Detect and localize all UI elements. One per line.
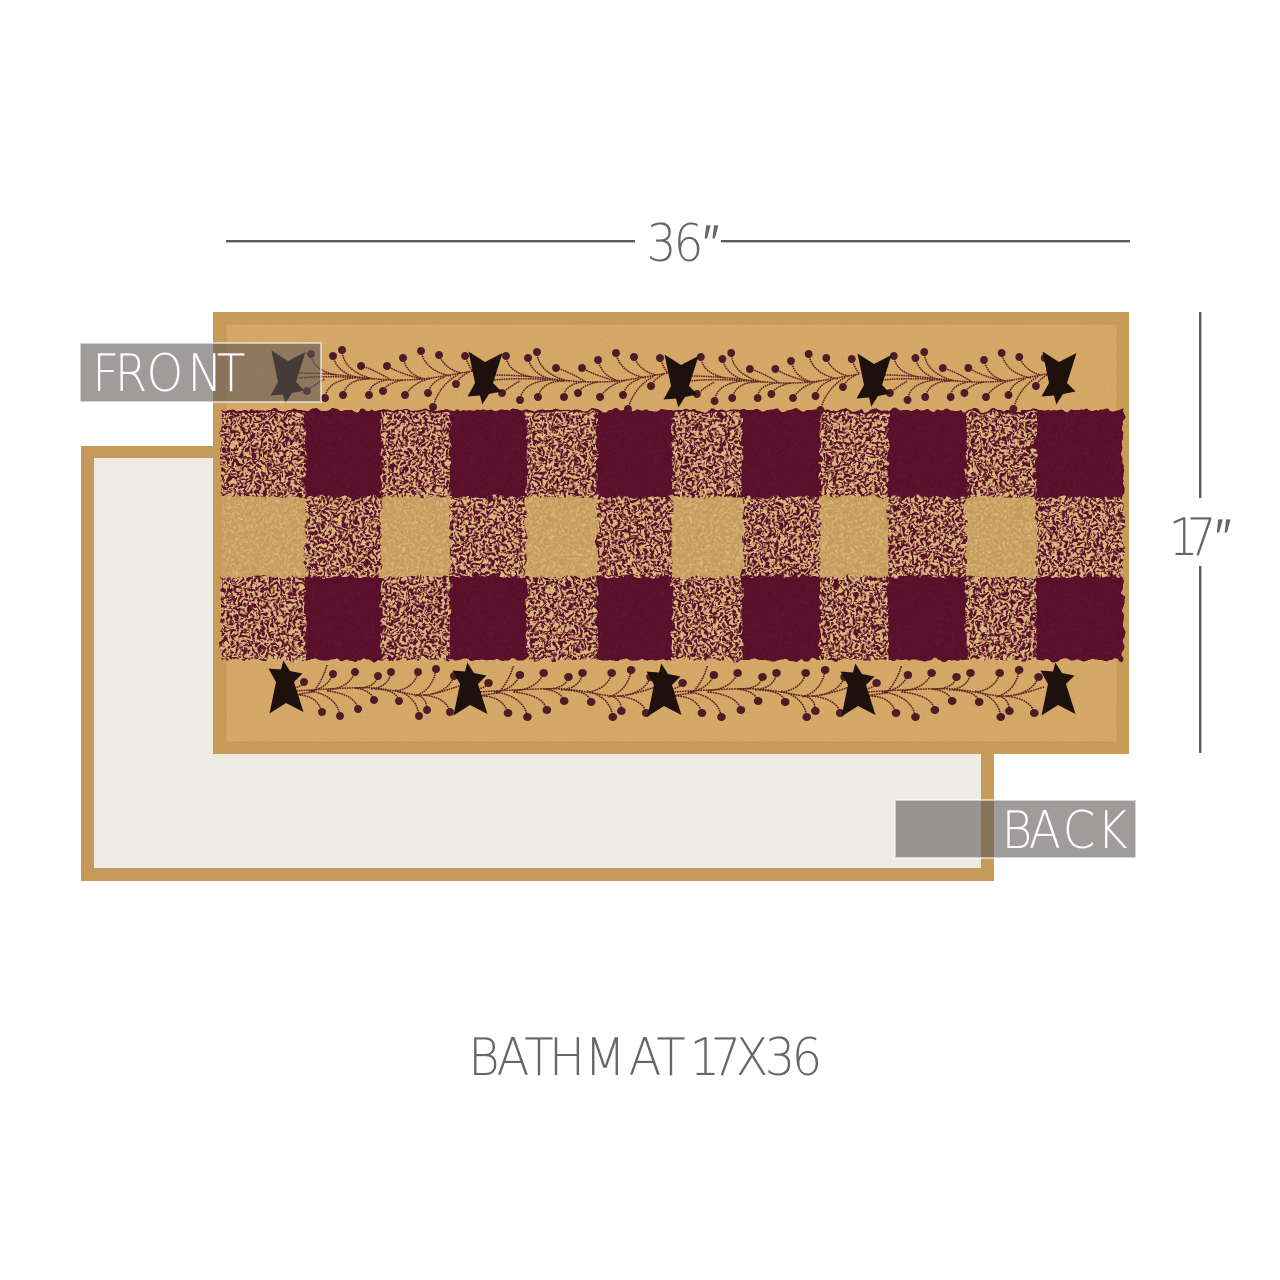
caption: BATHMAT 17X36	[468, 1027, 822, 1087]
top stars	[270, 350, 1076, 408]
width dimension: 36 inches: 36″	[647, 213, 719, 274]
bottom vines	[294, 665, 1044, 721]
back of bathmat	[81, 446, 994, 881]
buffalo check shag panel	[221, 410, 1123, 660]
top vines	[299, 346, 1053, 414]
burgundy base	[221, 410, 1123, 660]
front of bathmat	[213, 312, 1129, 754]
label: FRONT: FRONT	[92, 343, 245, 404]
tan cells	[221, 497, 1036, 577]
tan cell light fibres	[221, 497, 1036, 577]
burgundy fibre texture	[221, 410, 1123, 660]
label: FRONT	[80, 343, 321, 404]
label: BACK: BACK	[1002, 800, 1128, 861]
height dimension: 17 inches: 17″	[1169, 507, 1231, 568]
gold speckle cells	[221, 412, 1123, 660]
rug base and hem	[213, 312, 1129, 754]
bottom stars	[268, 660, 1076, 716]
label: BACK	[895, 800, 1136, 861]
